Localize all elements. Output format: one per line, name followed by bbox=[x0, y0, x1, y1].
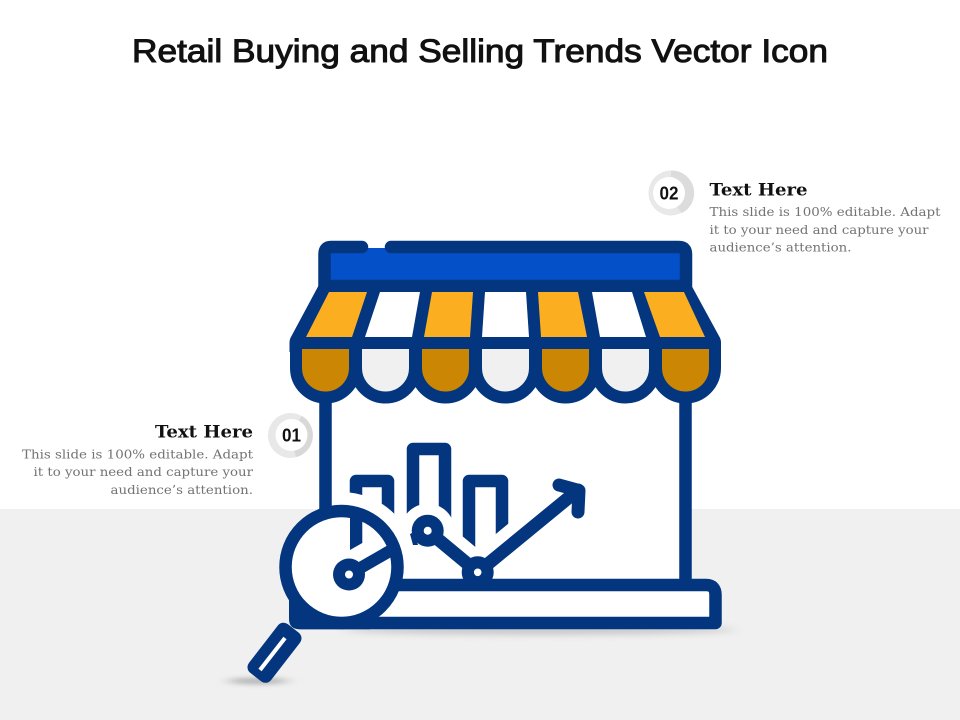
callout 02 bbox=[648, 170, 940, 254]
store interior bbox=[331, 400, 680, 580]
heading 01: Text Here bbox=[155, 422, 253, 442]
body text 02 bbox=[710, 204, 940, 254]
icon: retail store with trend chart and magnifier bbox=[254, 247, 721, 676]
badge 02: 02 bbox=[660, 182, 678, 204]
awning scallops bbox=[296, 343, 715, 398]
bar chart bbox=[356, 449, 502, 560]
chart halo cut-outs bbox=[350, 492, 508, 558]
title: Retail Buying and Selling Trends Vector Icon bbox=[132, 33, 828, 69]
badge 01 bbox=[268, 413, 313, 458]
lens node bbox=[333, 558, 365, 590]
magnifier handle bbox=[254, 630, 294, 676]
callout 01 bbox=[22, 413, 313, 497]
body text 01: it to your need and capture your bbox=[34, 464, 253, 479]
lens contents bbox=[350, 518, 390, 572]
body text 02: audience’s attention. bbox=[710, 240, 852, 254]
body text 01: audience’s attention. bbox=[110, 482, 253, 497]
ground shadows bbox=[228, 626, 735, 684]
magnifier lens bbox=[286, 511, 398, 623]
trend line with arrow bbox=[428, 485, 579, 572]
badge 02 bbox=[648, 170, 694, 216]
store counter base bbox=[289, 585, 716, 629]
awning stripes bbox=[306, 292, 705, 337]
body text 01 bbox=[22, 446, 253, 497]
walls bbox=[326, 396, 686, 590]
badge 01: 01 bbox=[282, 424, 301, 446]
chart nodes bbox=[410, 515, 494, 588]
body text 02: This slide is 100% editable. Adapt bbox=[710, 204, 940, 219]
magnifier bbox=[254, 505, 398, 676]
heading 02: Text Here bbox=[710, 180, 808, 200]
awning frame bbox=[290, 281, 721, 352]
awning bbox=[290, 247, 721, 398]
awning top band bbox=[324, 247, 686, 286]
body text 01: This slide is 100% editable. Adapt bbox=[22, 446, 253, 462]
body text 02: it to your need and capture your bbox=[710, 222, 929, 237]
